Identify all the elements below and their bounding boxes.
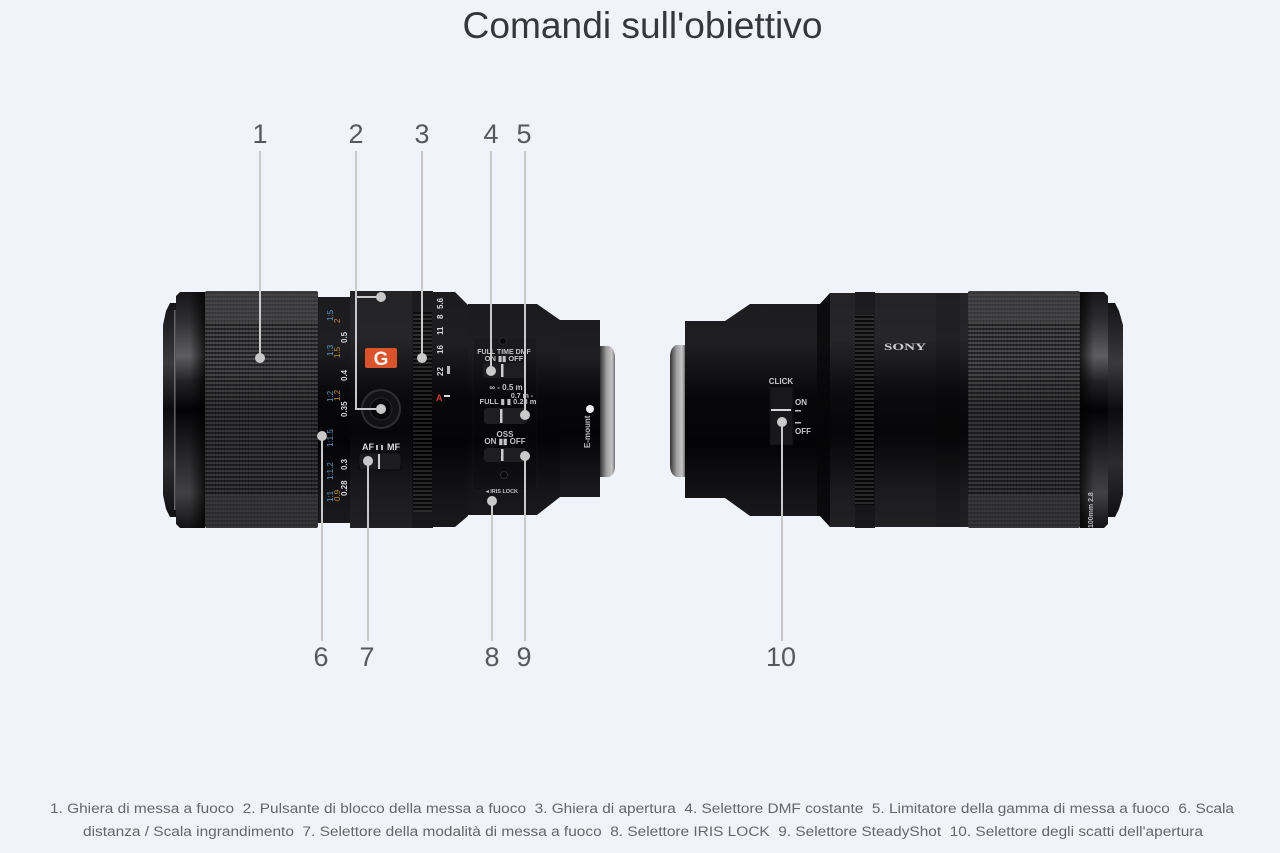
caption legend [50, 801, 1234, 840]
front filter rim [1108, 303, 1123, 517]
focus hold button [362, 390, 400, 428]
focus ring [205, 291, 318, 528]
scale barrel: 0.5 [340, 331, 349, 343]
switch panel: FULL TIME DMF [477, 349, 531, 356]
callout 5 [520, 151, 530, 420]
aperture ring zone: 11 [436, 326, 445, 335]
number labels: 4 [483, 119, 499, 149]
lens spec text: 100mm 2.8 [1088, 492, 1095, 528]
rear barrel [468, 304, 560, 515]
switch panel: ∞ - 0.5 m [489, 383, 523, 392]
E-mount mark [583, 405, 594, 448]
aperture ring zone: A [436, 393, 443, 403]
aperture ring zone [412, 291, 468, 528]
click switch: CLICK [769, 377, 793, 386]
title: Comandi sull'obiettivo [462, 5, 822, 46]
aperture ring [855, 292, 875, 528]
number labels: 8 [484, 642, 500, 672]
switch panel: ◂ IRIS LOCK [485, 489, 518, 495]
AF/MF switch [359, 442, 401, 470]
switch panel [473, 338, 537, 495]
switch panel: ON ▮▮ OFF [485, 354, 524, 363]
scale barrel: 0.3 [340, 458, 349, 470]
front barrel [176, 292, 205, 528]
scale barrel: 1:1 [326, 490, 335, 502]
callout 8 [487, 496, 497, 641]
right lens photo [670, 291, 1123, 528]
callout 7 [363, 456, 373, 641]
scale barrel [318, 297, 350, 523]
callout 4 [486, 151, 496, 376]
E-mount mark: E-mount [583, 415, 592, 448]
Sony logo: SONY [884, 343, 926, 353]
front barrel [1080, 292, 1108, 528]
AF/MF switch: MF [387, 442, 400, 452]
callout 6 [317, 431, 327, 641]
switch panel: ON ▮▮ OFF [484, 437, 526, 446]
scale barrel: 1:1.5 [326, 429, 335, 447]
switch panel: 0.7 m - [511, 393, 534, 400]
number labels [252, 119, 796, 672]
G badge: G [374, 349, 388, 370]
caption legend: distanza / Scala ingrandimento 7. Selettore della modalità di messa a fuoco 8. Selettore IRIS LOCK 9. Selettore SteadyShot 10. Selettore degli scatti dell'apertura [83, 824, 1203, 840]
click switch: ON [795, 398, 807, 407]
scale barrel: 1:3 [326, 344, 335, 356]
callout 2 [356, 151, 386, 414]
aperture ring zone: 5.6 [436, 297, 445, 309]
lens mount [670, 345, 685, 477]
scale barrel: 1.5 [333, 346, 342, 358]
rear barrel [685, 293, 830, 527]
aperture ring zone: 22 [436, 367, 445, 376]
AF/MF switch: AF [362, 442, 374, 452]
scale barrel: 0.28 [340, 480, 349, 496]
front filter rim [163, 303, 176, 517]
scale barrel: 0.4 [340, 369, 349, 381]
scale barrel: 0.9 [333, 489, 342, 501]
divider ring [936, 293, 960, 527]
caption legend: 1. Ghiera di messa a fuoco 2. Pulsante di blocco della messa a fuoco 3. Ghiera di apertura 4. Selettore DMF costante 5. Limitatore della gamma di messa a fuoco 6. Scala [50, 801, 1234, 817]
lens mount [600, 346, 615, 477]
number labels: 6 [313, 642, 329, 672]
G badge [365, 348, 397, 370]
scale barrel: 1:1.2 [326, 462, 335, 480]
focus ring [968, 291, 1080, 528]
scale barrel: 1:5 [326, 309, 335, 321]
switch panel: OSS [497, 430, 514, 439]
number labels: 2 [348, 119, 364, 149]
aperture ring zone: 8 [436, 314, 445, 319]
mid barrel [830, 293, 968, 527]
scale barrel: 2 [333, 318, 342, 323]
left lens photo [163, 291, 615, 528]
number labels: 10 [766, 642, 796, 672]
number labels: 3 [414, 119, 430, 149]
main barrel [350, 291, 412, 528]
scale barrel: 1:2 [326, 390, 335, 402]
callout 1 [255, 151, 265, 363]
click switch [769, 377, 811, 445]
number labels: 1 [252, 119, 268, 149]
number labels: 7 [359, 642, 375, 672]
aperture ring zone: 16 [436, 345, 445, 354]
number labels: 5 [516, 119, 532, 149]
scale barrel: 0.35 [340, 401, 349, 417]
switch panel: FULL ▮ ▮ 0.28 m [480, 397, 537, 406]
callout 3 [417, 151, 427, 363]
click switch: OFF [795, 427, 811, 436]
scale barrel: 1.2 [333, 389, 342, 401]
number labels: 9 [516, 642, 532, 672]
callout 9 [520, 451, 530, 641]
callout 10 [777, 417, 787, 641]
